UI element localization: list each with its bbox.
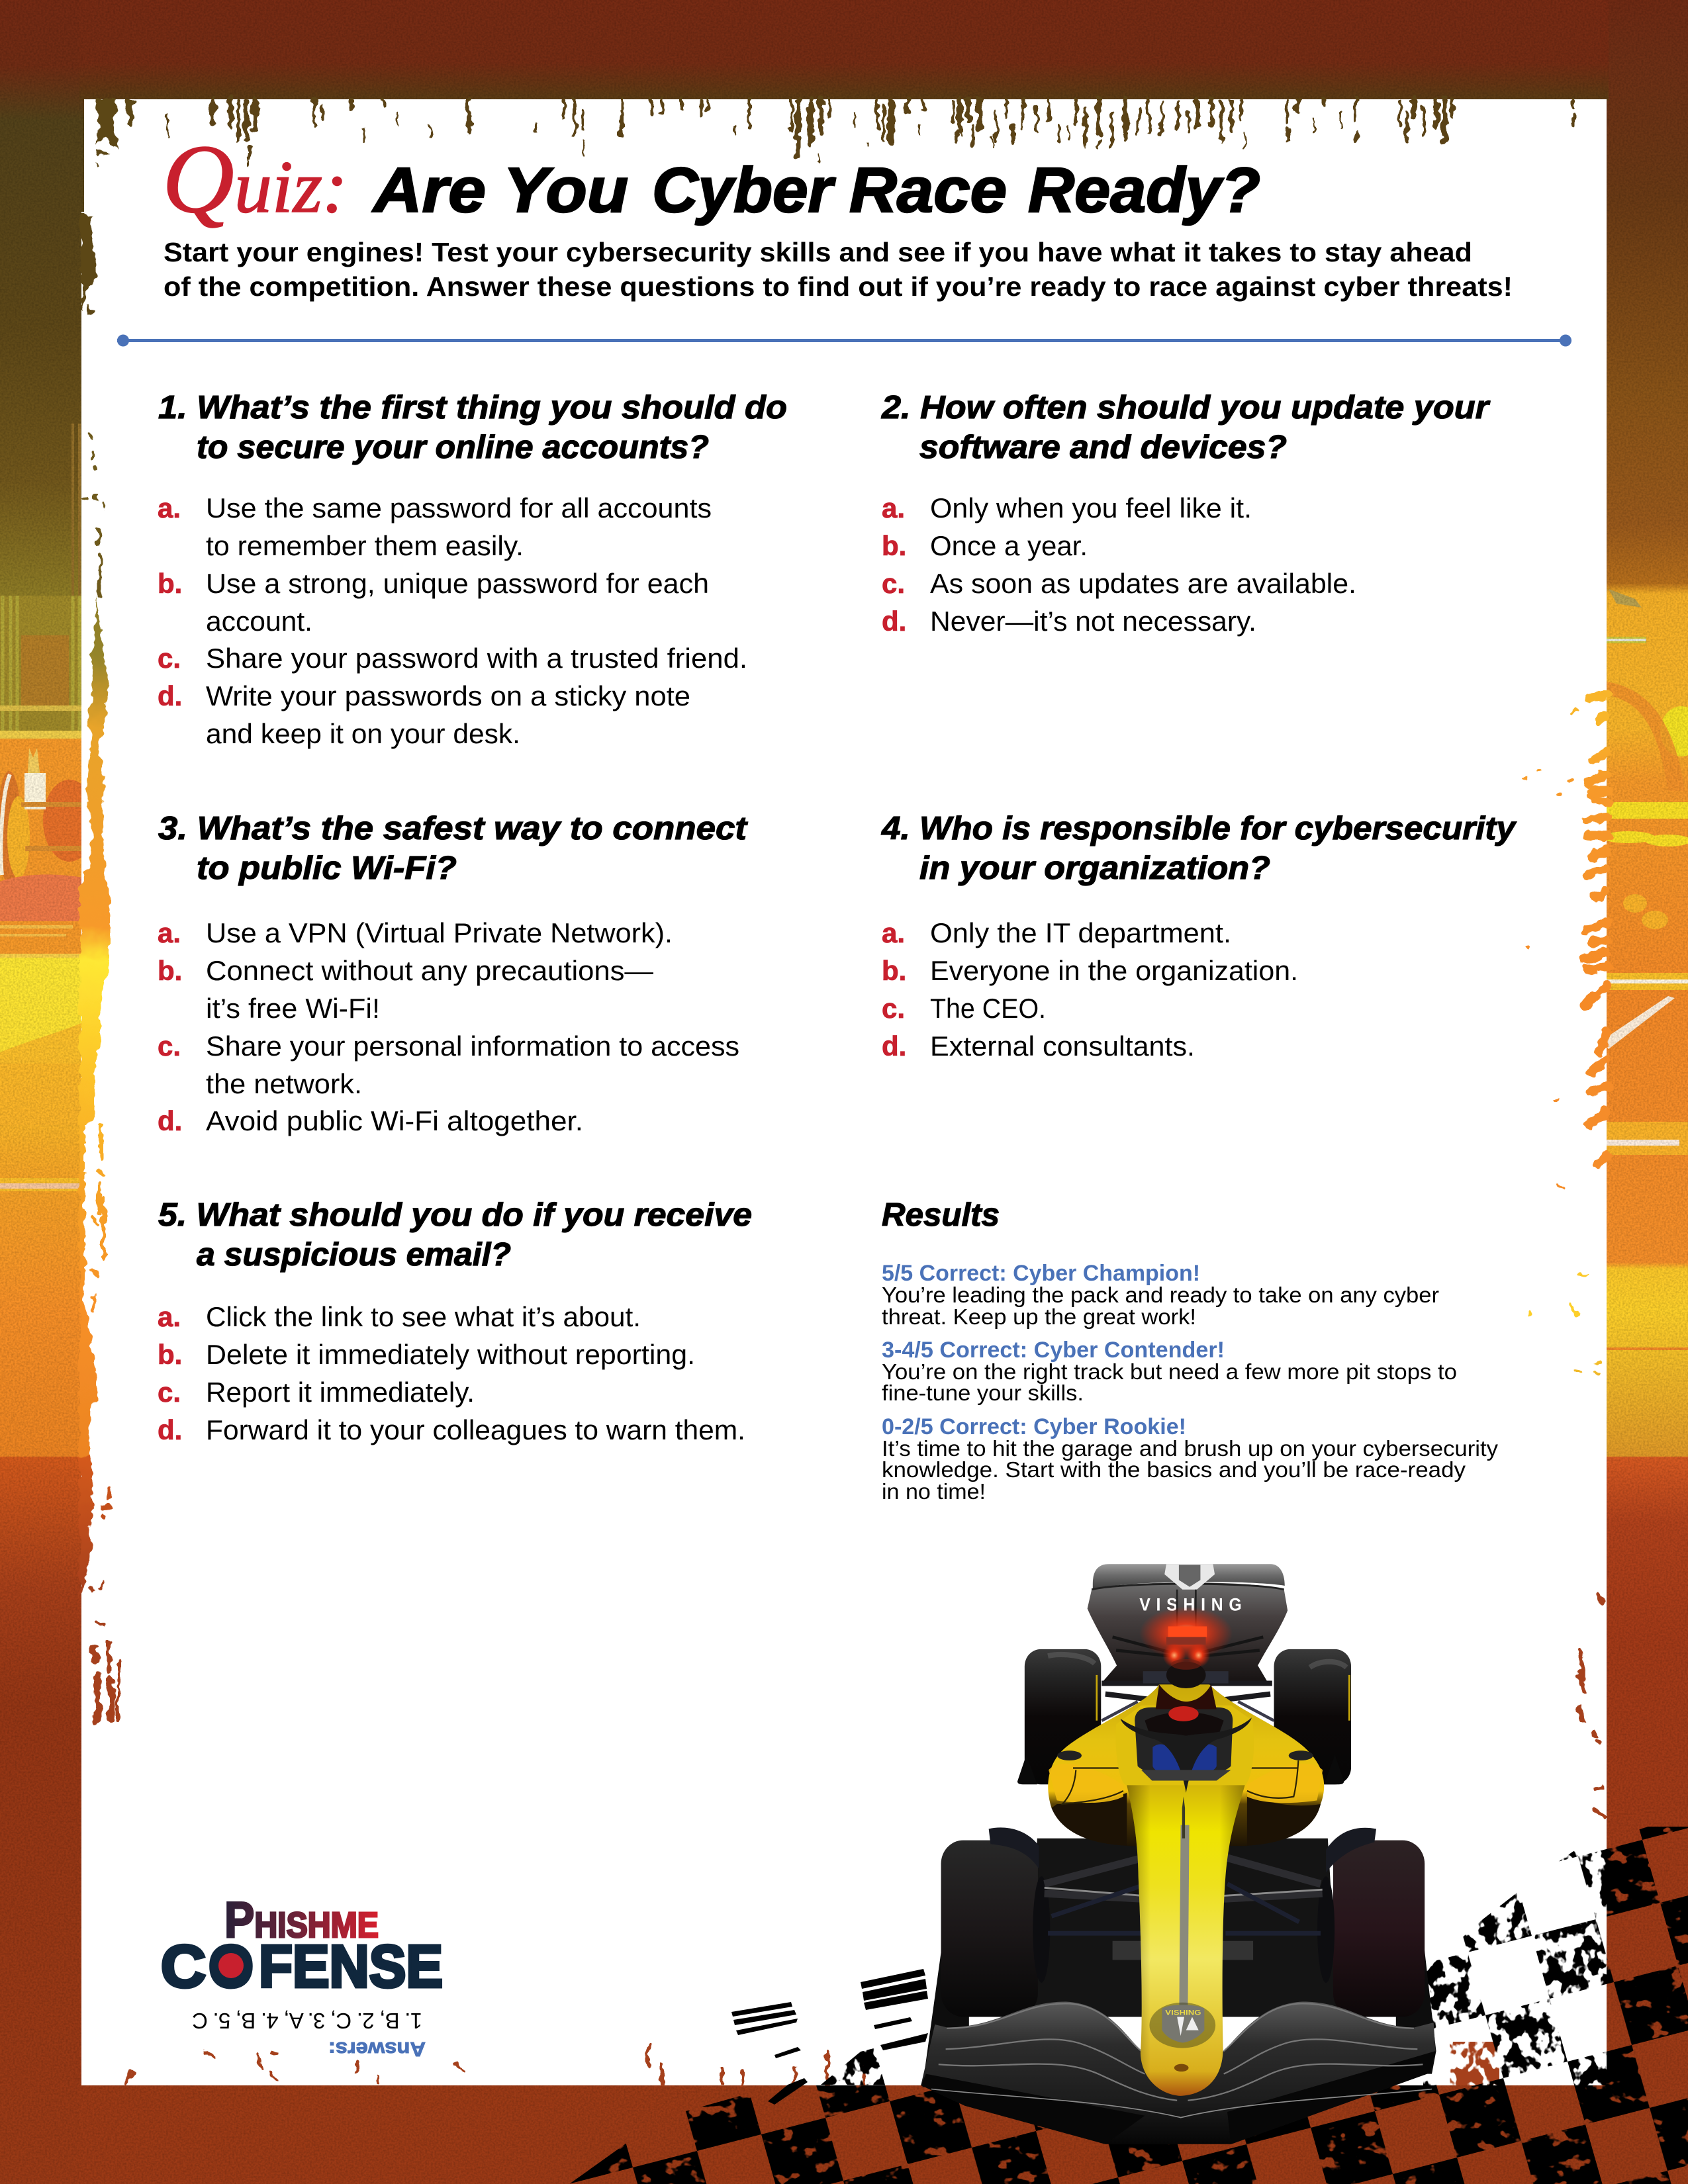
- title words: Are You Cyber Race Ready: Race: [849, 155, 1007, 226]
- question 1: c.: [158, 643, 181, 674]
- right edge lower flecks: [1578, 1595, 1605, 1817]
- brake discs and wheel hubs: [1033, 1876, 1335, 1983]
- question 3: c.: [158, 1030, 181, 1062]
- question 5: [158, 1197, 752, 1445]
- result: cyber champion: threat. Keep up the great work!: [882, 1304, 1196, 1329]
- question 5: Delete it immediately without reporting.: [206, 1339, 695, 1370]
- roll hoop and intake: [1156, 1659, 1217, 1721]
- question 5: b.: [158, 1339, 182, 1370]
- logo: PhishMe Cofense: [161, 1892, 443, 2000]
- question 2: b.: [882, 530, 906, 561]
- question 3: b.: [158, 955, 182, 986]
- logo: PhishMe Cofense: FENSE: [259, 1934, 443, 2000]
- question 2: [881, 390, 1491, 637]
- result: cyber contender: [882, 1338, 1457, 1405]
- question 2: Only when you feel like it.: [930, 492, 1252, 523]
- nose stripe: [1179, 1825, 1190, 2005]
- result: cyber rookie: [882, 1414, 1499, 1504]
- turning vanes: [1113, 1941, 1253, 1960]
- nose emblem: VISHING: [1165, 2009, 1201, 2017]
- results heading: Results: [882, 1197, 1000, 1233]
- question 1: to remember them easily.: [206, 530, 524, 561]
- checker breaking up on the white sheet: [821, 1827, 1609, 2085]
- sidepods: [1048, 1684, 1324, 1846]
- front suspension arms: [1045, 1857, 1323, 1933]
- question 1: Use a strong, unique password for each: [206, 568, 709, 599]
- question 4: in your organization?: [919, 850, 1270, 886]
- result: cyber champion: You’re leading the pack and ready to take on any cyber: [882, 1283, 1439, 1307]
- question 4: b.: [882, 955, 906, 986]
- question 5: 5. What should you do if you receive: [158, 1197, 752, 1233]
- logo: PhishMe Cofense: O: [209, 1934, 254, 2000]
- yellow nose: [1116, 1706, 1254, 2096]
- brush streaks: [731, 1969, 928, 2105]
- rear wing lettering: VISHING: [1139, 1596, 1242, 1614]
- result: cyber rookie: It’s time to hit the garage and brush up on your cybersecurity: [882, 1436, 1499, 1461]
- right edge flecks: [1524, 695, 1607, 1374]
- result: cyber rookie: knowledge. Start with the basics and you’ll be race-ready: [882, 1457, 1466, 1482]
- left edge stray flecks: [85, 1125, 109, 1517]
- question 4: d.: [882, 1030, 906, 1062]
- intro text: of the competition. Answer these questions to find out if you’re ready to race against cyber threats!: [164, 271, 1513, 302]
- question 2: 2. How often should you update your: [881, 390, 1491, 426]
- checker on the rust border: [569, 1827, 1688, 2184]
- result: cyber champion: 5/5 Correct: Cyber Champion!: [882, 1261, 1200, 1286]
- question 4: External consultants.: [930, 1030, 1195, 1062]
- question 1: account.: [206, 606, 312, 637]
- result: cyber contender: You’re on the right track but need a few more pit stops to: [882, 1359, 1457, 1384]
- intro text: Start your engines! Test your cybersecurity skills and see if you have what it takes to stay ahead: [164, 237, 1472, 267]
- upside-down answer key: [192, 2009, 426, 2061]
- question 3: Avoid public Wi-Fi altogether.: [206, 1105, 583, 1136]
- question 2: Never—it’s not necessary.: [930, 606, 1256, 637]
- question 1: to secure your online accounts?: [197, 430, 709, 465]
- front tires and side skirts: [922, 1827, 1436, 2087]
- question 5: d.: [158, 1414, 182, 1445]
- question 1: Share your password with a trusted friend.: [206, 643, 747, 674]
- question 5: Click the link to see what it’s about.: [206, 1301, 641, 1332]
- question 1: a.: [158, 492, 181, 523]
- question 3: [158, 811, 748, 1136]
- question 3: it’s free Wi-Fi!: [206, 993, 380, 1024]
- title words: Are You Cyber Race Ready: [372, 155, 1260, 226]
- checkered flag: [569, 1827, 1688, 2184]
- question 3: Use a VPN (Virtual Private Network).: [206, 917, 673, 948]
- floor under the car: [1030, 1839, 1338, 2017]
- question 5: a.: [158, 1301, 181, 1332]
- upside-down answer key: 1. B, 2. C, 3. A, 4. B, 5. C: [192, 2009, 422, 2033]
- question 4: 4. Who is responsible for cybersecurity: [881, 811, 1517, 846]
- question 5: c.: [158, 1377, 181, 1408]
- question 1: and keep it on your desk.: [206, 718, 520, 749]
- rear wing emblem: [1164, 1564, 1215, 1627]
- right side: track lights and reflections: [1597, 589, 1688, 1350]
- top left blotch: [81, 99, 134, 334]
- question 4: c.: [882, 993, 905, 1024]
- question 4: Only the IT department.: [930, 917, 1231, 948]
- question 3: Connect without any precautions—: [206, 955, 653, 986]
- title words: Are You Cyber Race Ready: Ready?: [1028, 155, 1260, 226]
- result: cyber rookie: in no time!: [882, 1479, 986, 1504]
- title words: Are You Cyber Race Ready: Cyber: [652, 155, 836, 226]
- question 1: Use the same password for all accounts: [206, 492, 712, 523]
- title: [162, 125, 1260, 234]
- race car: [921, 1564, 1436, 2144]
- logo: PhishMe Cofense: PHISHME: [224, 1892, 379, 1948]
- question 5: a suspicious email?: [197, 1237, 511, 1273]
- result: cyber champion: [882, 1261, 1439, 1329]
- question 4: Everyone in the organization.: [930, 955, 1298, 986]
- left side: grandstand and wheel detail: [0, 424, 96, 1191]
- logo: PhishMe Cofense: C: [161, 1934, 206, 2000]
- question 2: software and devices?: [919, 430, 1287, 465]
- question 3: the network.: [206, 1068, 362, 1099]
- cockpit and halo: [1121, 1707, 1252, 1793]
- question 4: a.: [882, 917, 905, 948]
- title word: Quiz: Quiz:: [162, 125, 348, 234]
- question 2: As soon as updates are available.: [930, 568, 1356, 599]
- small olive specks down the left margin: [83, 433, 104, 596]
- question 4: [881, 811, 1517, 1062]
- question 2: a.: [882, 492, 905, 523]
- title words: Are You Cyber Race Ready: Are You: [372, 155, 628, 226]
- result: cyber contender: 3-4/5 Correct: Cyber Contender!: [882, 1338, 1225, 1363]
- rear wing: [1088, 1564, 1288, 1681]
- question 1: [158, 390, 787, 749]
- question 3: 3. What’s the safest way to connect: [158, 811, 748, 846]
- intro text: [164, 237, 1513, 302]
- question 1: d.: [158, 680, 182, 711]
- question 3: a.: [158, 917, 181, 948]
- question 5: Forward it to your colleagues to warn them.: [206, 1414, 745, 1445]
- question 4: The CEO.: [930, 993, 1046, 1024]
- question 1: 1. What’s the first thing you should do: [158, 390, 787, 426]
- upside-down answer key: Answers:: [328, 2038, 426, 2061]
- front wing: [921, 2002, 1435, 2144]
- rear tires: [1017, 1649, 1351, 1784]
- divider line with end dots: [117, 335, 1571, 347]
- question 1: Write your passwords on a sticky note: [206, 680, 690, 711]
- question 5: Report it immediately.: [206, 1377, 475, 1408]
- rear suspension: [1102, 1671, 1272, 1700]
- result: cyber contender: fine-tune your skills.: [882, 1381, 1084, 1405]
- red warning lights: [1139, 1607, 1233, 1667]
- question 3: Share your personal information to access: [206, 1030, 739, 1062]
- top edge drips: [167, 99, 1573, 165]
- mirrors: [1057, 1751, 1313, 1760]
- question 2: Once a year.: [930, 530, 1088, 561]
- results: [882, 1197, 1499, 1504]
- result: cyber rookie: 0-2/5 Correct: Cyber Rookie!: [882, 1414, 1186, 1439]
- question 1: b.: [158, 568, 182, 599]
- nose emblem: [1149, 2003, 1215, 2048]
- question 3: to public Wi-Fi?: [197, 850, 457, 886]
- question 3: d.: [158, 1105, 182, 1136]
- question 2: c.: [882, 568, 905, 599]
- left edge torn strip: [79, 596, 109, 1602]
- lower left flecks: [91, 1582, 864, 2085]
- question 2: d.: [882, 606, 906, 637]
